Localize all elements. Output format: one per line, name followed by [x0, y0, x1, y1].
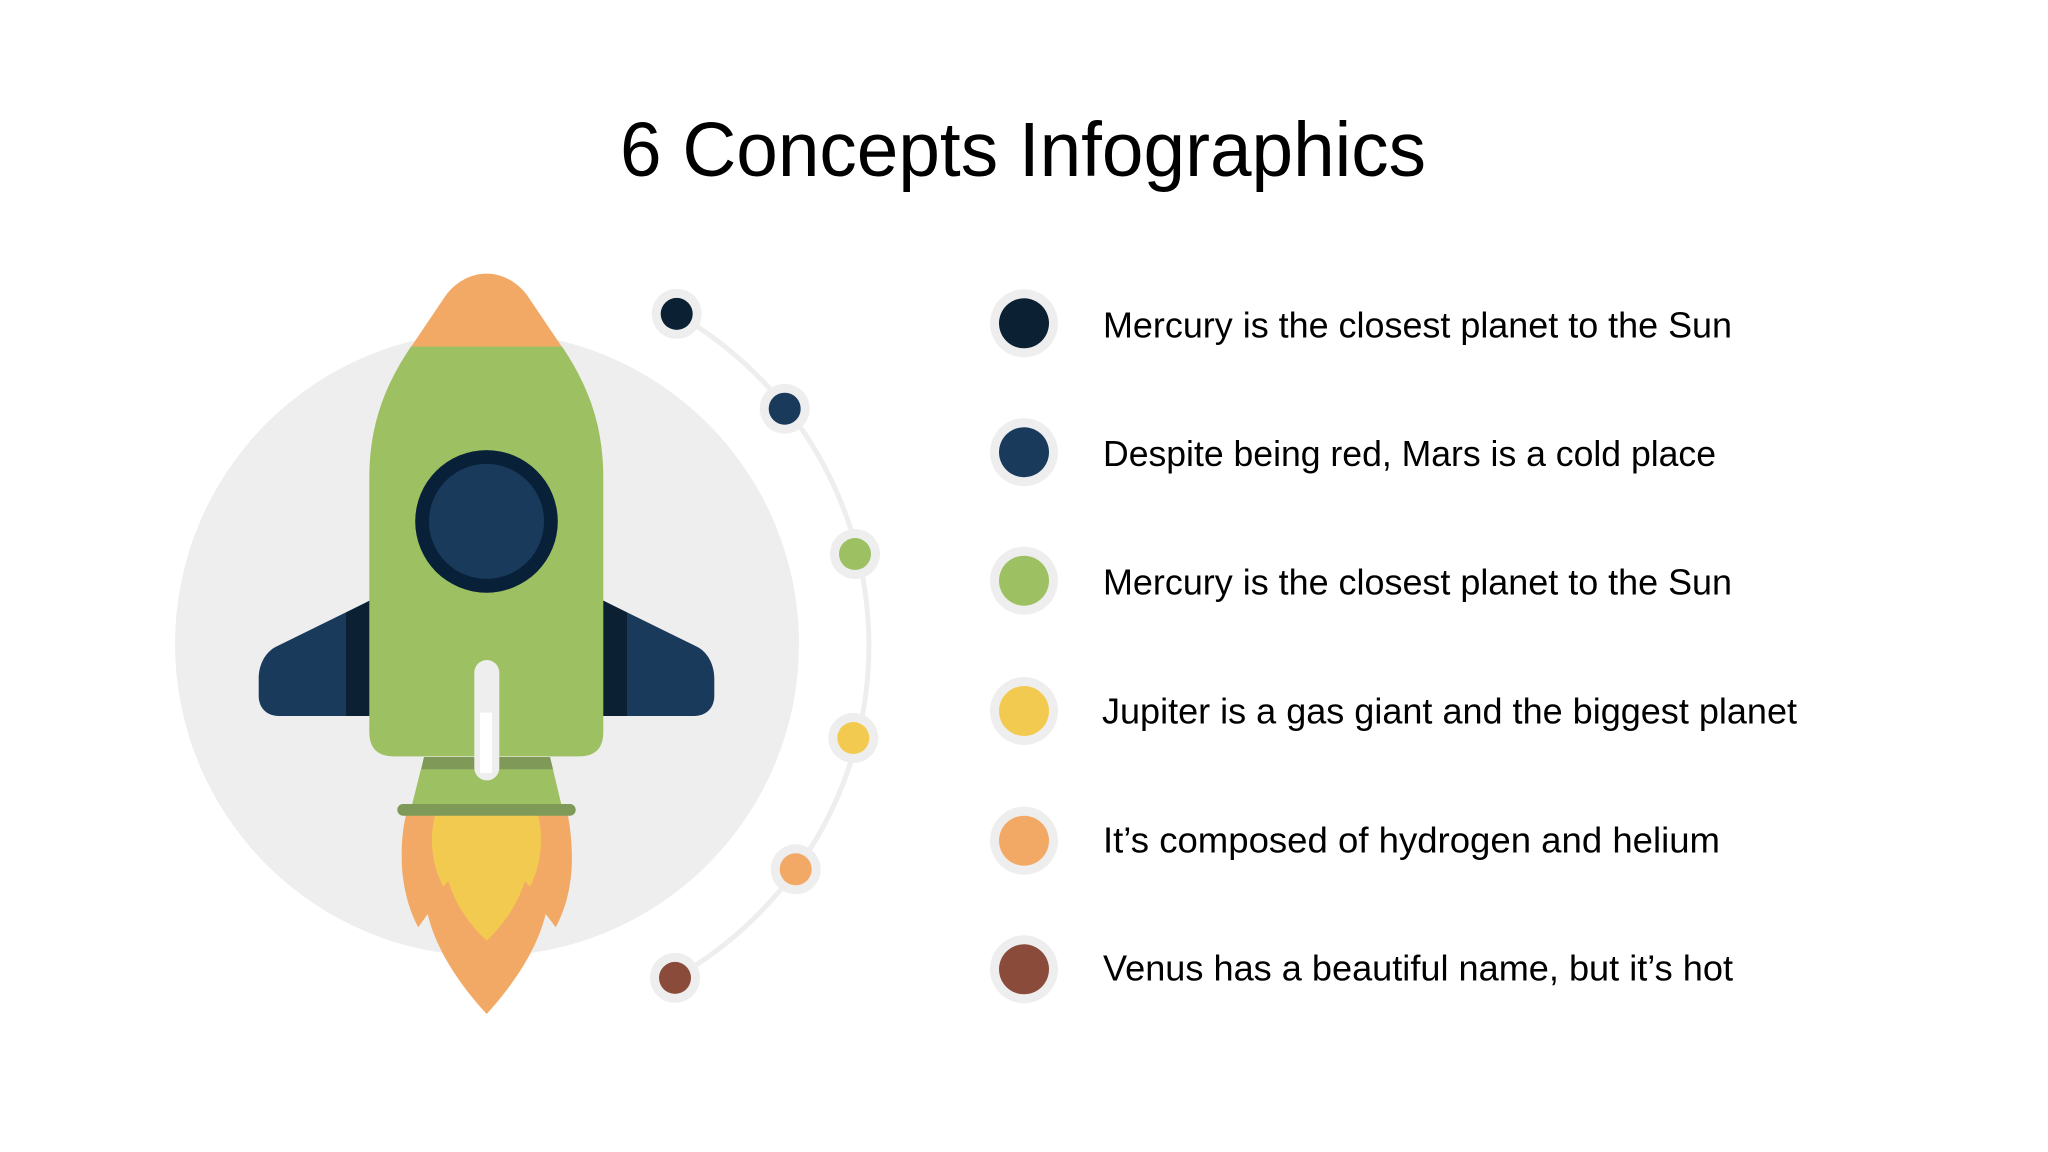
- rocket nozzle: [397, 757, 576, 816]
- nozzle ring: [397, 804, 576, 816]
- legend item 2: [990, 418, 1716, 486]
- legend item 2: Despite being red, Mars is a cold place: [1103, 433, 1716, 474]
- orbit node 6: [650, 953, 700, 1003]
- legend item 1: Mercury is the closest planet to the Sun: [1103, 304, 1732, 345]
- orbit arc: [675, 314, 869, 978]
- orbit node 2: [760, 384, 810, 434]
- nozzle cone: [412, 757, 562, 806]
- legend item 6: [990, 935, 1733, 1003]
- orbit node 4: [828, 713, 878, 763]
- nozzle dark band: [422, 757, 553, 769]
- legend item 5: It’s composed of hydrogen and helium: [1103, 819, 1720, 860]
- legend item 6: Venus has a beautiful name, but it’s hot: [1103, 948, 1733, 988]
- legend item 5: [990, 807, 1720, 875]
- legend item 4: [990, 677, 1797, 745]
- rocket illustration: [259, 274, 714, 1014]
- legend item 4: Jupiter is a gas giant and the biggest planet: [1102, 690, 1797, 731]
- title: 6 Concepts Infographics: [620, 107, 1426, 193]
- orbit node 1: [652, 289, 702, 339]
- rocket body: [369, 346, 603, 756]
- rocket window: [415, 450, 558, 593]
- legend item 1: [990, 289, 1732, 357]
- rocket flames: [402, 812, 572, 1014]
- right wing: [601, 600, 714, 716]
- orbit timeline: [650, 289, 880, 1003]
- background circle: [175, 332, 799, 956]
- legend item 3: Mercury is the closest planet to the Sun: [1103, 562, 1732, 602]
- orbit node 5: [771, 844, 821, 894]
- legend item 3: [990, 547, 1732, 615]
- outer orange flame: [402, 812, 572, 1014]
- orbit node 3: [830, 529, 880, 579]
- legend list: [990, 289, 1797, 1003]
- rocket nose cone: [411, 274, 562, 347]
- left wing: [259, 600, 372, 716]
- inner yellow flame: [432, 812, 541, 941]
- fuel gauge capsule: [474, 660, 499, 780]
